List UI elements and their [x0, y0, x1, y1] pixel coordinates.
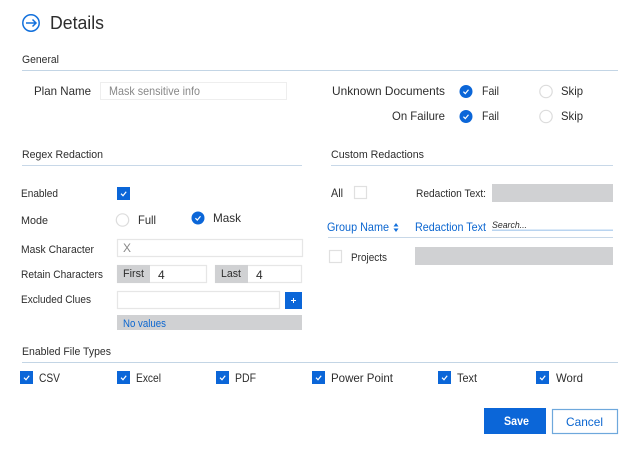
field: Redaction Text — [416, 184, 613, 202]
panel: General — [22, 54, 618, 123]
table header — [327, 220, 613, 238]
panel: Enabled File Types — [20, 346, 618, 385]
checkbox: PDF: PDF — [235, 371, 256, 385]
heading: Details: Details — [50, 13, 104, 33]
heading: Regex Redaction: Regex Redaction — [22, 149, 103, 161]
checkbox: Power Point: Power Point — [331, 371, 394, 385]
panel: Custom Redactions — [327, 149, 613, 265]
title: Details header — [23, 13, 104, 33]
icon: circled right arrow — [23, 15, 39, 31]
field: All: All — [331, 186, 343, 200]
field: Unknown Documents — [332, 84, 583, 98]
field: Mask Character: X — [123, 241, 131, 255]
field: On Failure: On Failure — [392, 109, 445, 123]
heading: Custom Redactions: Custom Redactions — [331, 149, 424, 161]
field: Mode: Mask — [213, 211, 242, 225]
table row: Projects: Projects — [351, 252, 387, 264]
table header: Redaction Text — [415, 220, 487, 234]
field: Retain Characters: 4 — [158, 268, 165, 282]
heading: General: General — [22, 54, 59, 66]
checkbox: CSV: CSV — [39, 371, 60, 385]
button: Cancel: Cancel — [566, 415, 603, 429]
checkbox: Word — [536, 371, 583, 385]
field: Retain Characters: Retain Characters — [21, 269, 103, 281]
button: add clue — [285, 292, 302, 309]
field: Retain Characters: Last — [221, 268, 241, 280]
field: Enabled: Enabled — [21, 188, 58, 200]
button: Save — [484, 408, 546, 434]
checkbox: Text: Text — [457, 371, 478, 385]
field: Unknown Documents: Fail — [482, 84, 499, 98]
field: Mask Character: Mask Character — [21, 244, 94, 256]
panel: Regex Redaction — [21, 149, 302, 330]
field: Plan Name — [34, 82, 286, 100]
field: Retain Characters: 4 — [256, 268, 263, 282]
field: Retain Characters — [21, 265, 302, 283]
field: Mode — [21, 211, 242, 227]
table row: Projects — [330, 247, 613, 265]
checkbox: Word: Word — [556, 371, 583, 385]
list: No values: No values — [123, 318, 166, 330]
field: On Failure — [392, 109, 583, 123]
checkbox: Excel — [117, 371, 161, 385]
field: On Failure: Fail — [482, 109, 499, 123]
field: On Failure: Skip — [561, 109, 583, 123]
button: Save: Save — [504, 416, 529, 428]
field: Unknown Documents: Skip — [561, 84, 583, 98]
field: Mode: Mode — [21, 215, 48, 227]
field: Excluded Clues — [21, 292, 302, 330]
checkbox: Text — [438, 371, 478, 385]
icon: sort — [394, 223, 398, 232]
field: Unknown Documents: Unknown Documents — [332, 84, 445, 98]
field: Mode: Full — [138, 213, 156, 227]
checkbox: PDF — [216, 371, 256, 385]
checkbox: Excel: Excel — [136, 371, 161, 385]
table header: Search... — [492, 220, 527, 231]
field: Excluded Clues: Excluded Clues — [21, 294, 91, 306]
heading: Enabled File Types: Enabled File Types — [22, 346, 111, 358]
field: Enabled — [21, 187, 130, 200]
button: Cancel — [552, 410, 618, 434]
field: Mask Character — [21, 240, 302, 256]
checkbox: CSV — [20, 371, 60, 385]
field: Plan Name: Plan Name — [34, 84, 91, 98]
field: Plan Name: Mask sensitive info — [109, 84, 200, 98]
field: Redaction Text: Redaction Text: — [416, 188, 486, 200]
table header: Group Name — [327, 220, 389, 234]
list: No values — [117, 315, 302, 330]
field: Retain Characters: First — [123, 268, 144, 280]
field: All — [331, 186, 366, 200]
